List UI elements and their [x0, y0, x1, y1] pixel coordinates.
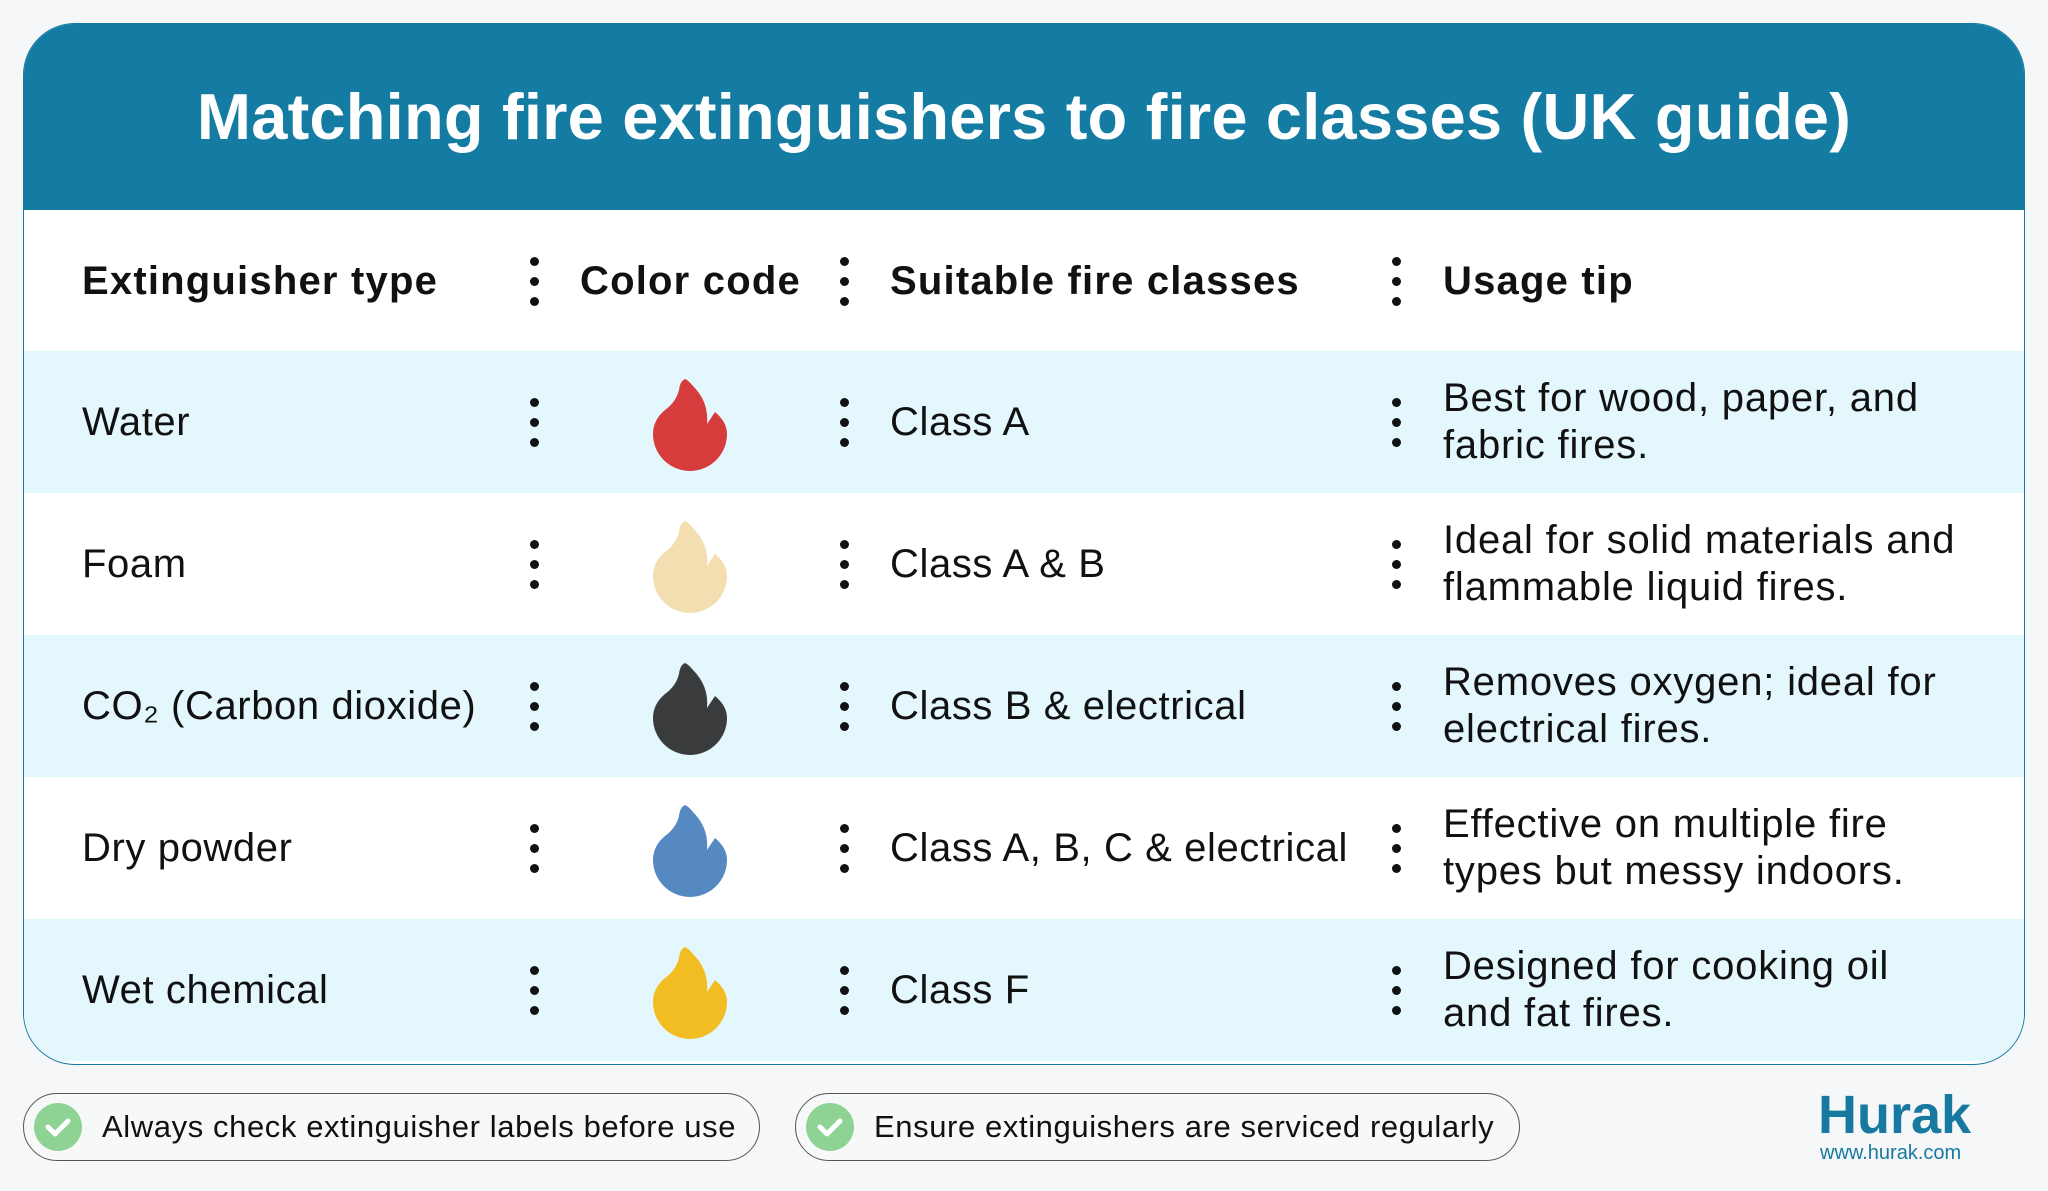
logo: Hurak: Hurak	[1818, 1085, 1971, 1145]
row: foam: flammable liquid fires.	[1443, 565, 1848, 609]
row: foam: Class A & B	[890, 542, 1106, 586]
row: dry powder: Dry powder	[82, 826, 293, 870]
icon: yellow flame	[653, 947, 727, 1039]
pill: serviced	[795, 1093, 1520, 1161]
row: dry powder: Effective on multiple fire	[1443, 802, 1888, 846]
title: Matching fire extinguishers to fire classes (UK guide)	[197, 80, 1851, 153]
row: CO2: CO₂ (Carbon dioxide)	[82, 684, 476, 728]
row: dry powder: Class A, B, C & electrical	[890, 826, 1348, 870]
row: CO2: Class B & electrical	[890, 684, 1247, 728]
header row: Extinguisher type	[82, 258, 438, 302]
row: water	[24, 351, 2024, 493]
row: water: Class A	[890, 400, 1030, 444]
icon: blue flame	[653, 805, 727, 897]
row: CO2: electrical fires.	[1443, 707, 1712, 751]
header row: Suitable fire classes	[890, 258, 1300, 302]
row: dry powder	[24, 777, 2024, 919]
row: wet chemical: Class F	[890, 968, 1030, 1012]
row: foam	[24, 493, 2024, 635]
row: wet chemical: Wet chemical	[82, 968, 329, 1012]
row: wet chemical: Designed for cooking oil	[1443, 944, 1889, 988]
row: wet chemical	[24, 919, 2024, 1061]
header row: Color code	[580, 258, 801, 302]
icon: check	[806, 1103, 854, 1151]
icon: check	[34, 1103, 82, 1151]
header row: Usage tip	[1443, 258, 1634, 302]
icon: cream flame	[653, 521, 727, 613]
pill: serviced: Ensure extinguishers are serviced regularly	[874, 1109, 1494, 1144]
logo: Hurak: www.hurak.com	[1820, 1142, 1961, 1164]
row: foam: Ideal for solid materials and	[1443, 518, 1955, 562]
row: dry powder: types but messy indoors.	[1443, 849, 1905, 893]
pill: check labels	[23, 1093, 760, 1161]
row: foam: Foam	[82, 542, 187, 586]
title	[24, 24, 2024, 210]
row: water: Best for wood, paper, and	[1443, 376, 1919, 420]
row: wet chemical: and fat fires.	[1443, 991, 1674, 1035]
icon: black flame	[653, 663, 727, 755]
icon: red flame	[653, 379, 727, 471]
row: CO2	[24, 635, 2024, 777]
row: water: fabric fires.	[1443, 423, 1649, 467]
pill: check labels: Always check extinguisher labels before use	[102, 1109, 736, 1144]
header row	[24, 210, 2024, 374]
row: CO2: Removes oxygen; ideal for	[1443, 660, 1937, 704]
row: water: Water	[82, 400, 190, 444]
